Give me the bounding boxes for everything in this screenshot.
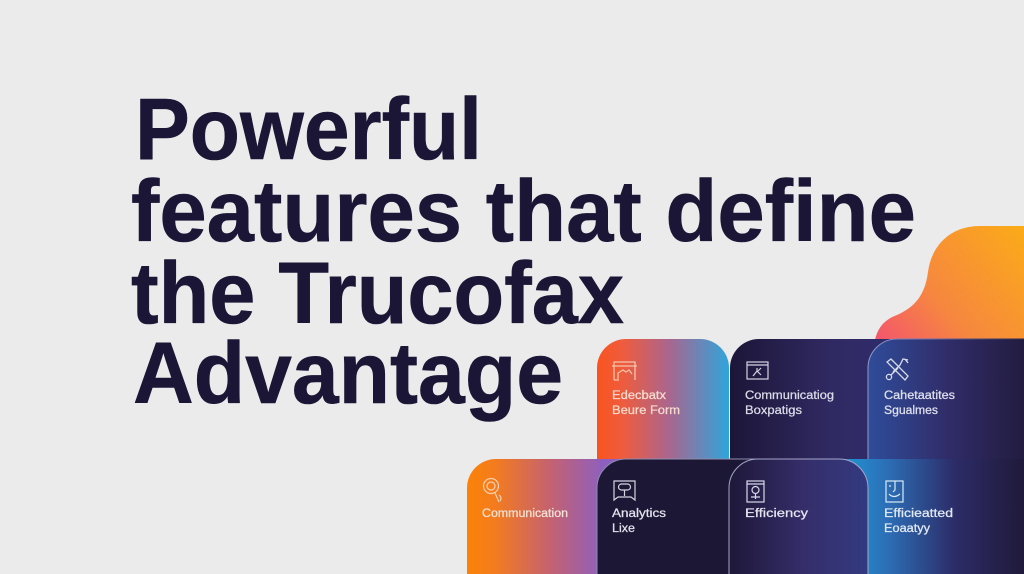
label	[612, 508, 666, 535]
icon: target search	[484, 478, 501, 502]
label: Efficieatted	[884, 508, 953, 520]
label: Cahetaatites	[884, 390, 955, 402]
label: Eoaatyy	[884, 523, 930, 535]
label: Edecbatx	[612, 390, 666, 402]
title: features that define	[131, 163, 916, 260]
label	[745, 390, 834, 417]
label	[884, 508, 953, 535]
label: Communication	[482, 508, 568, 520]
icon: chart window	[747, 362, 768, 379]
card: Edecbatx Beure Form	[597, 339, 729, 459]
title	[131, 81, 916, 422]
card: Efficiency	[729, 459, 868, 574]
label: Lixe	[612, 523, 635, 535]
label: Boxpatigs	[745, 405, 802, 417]
icon: badge	[747, 481, 764, 502]
card: Communication	[467, 459, 640, 574]
label	[612, 390, 680, 417]
card: Cahetaatites Sgualmes	[868, 339, 1024, 459]
card row: top	[597, 339, 1024, 459]
icon: smiling face panel	[886, 481, 903, 502]
title: the Trucofax	[131, 245, 624, 342]
title: Powerful	[135, 81, 482, 178]
label: Beure Form	[612, 405, 680, 417]
card: Communicatiog Boxpatigs	[730, 339, 900, 459]
icon: monitor	[614, 481, 635, 500]
label: Communicatiog	[745, 390, 834, 402]
decorative orange blob	[875, 226, 1024, 340]
label: Efficiency	[745, 508, 808, 520]
title: Advantage	[133, 325, 563, 422]
label	[884, 390, 955, 417]
icon: browser frame	[612, 362, 637, 380]
icon: crossed tools	[886, 359, 908, 380]
card: Analytics Lixe	[597, 459, 760, 574]
card: Efficieatted Eoaatyy	[830, 459, 1024, 574]
label: Analytics	[612, 508, 666, 520]
card row: bottom	[467, 459, 1024, 574]
label: Sgualmes	[884, 405, 938, 417]
